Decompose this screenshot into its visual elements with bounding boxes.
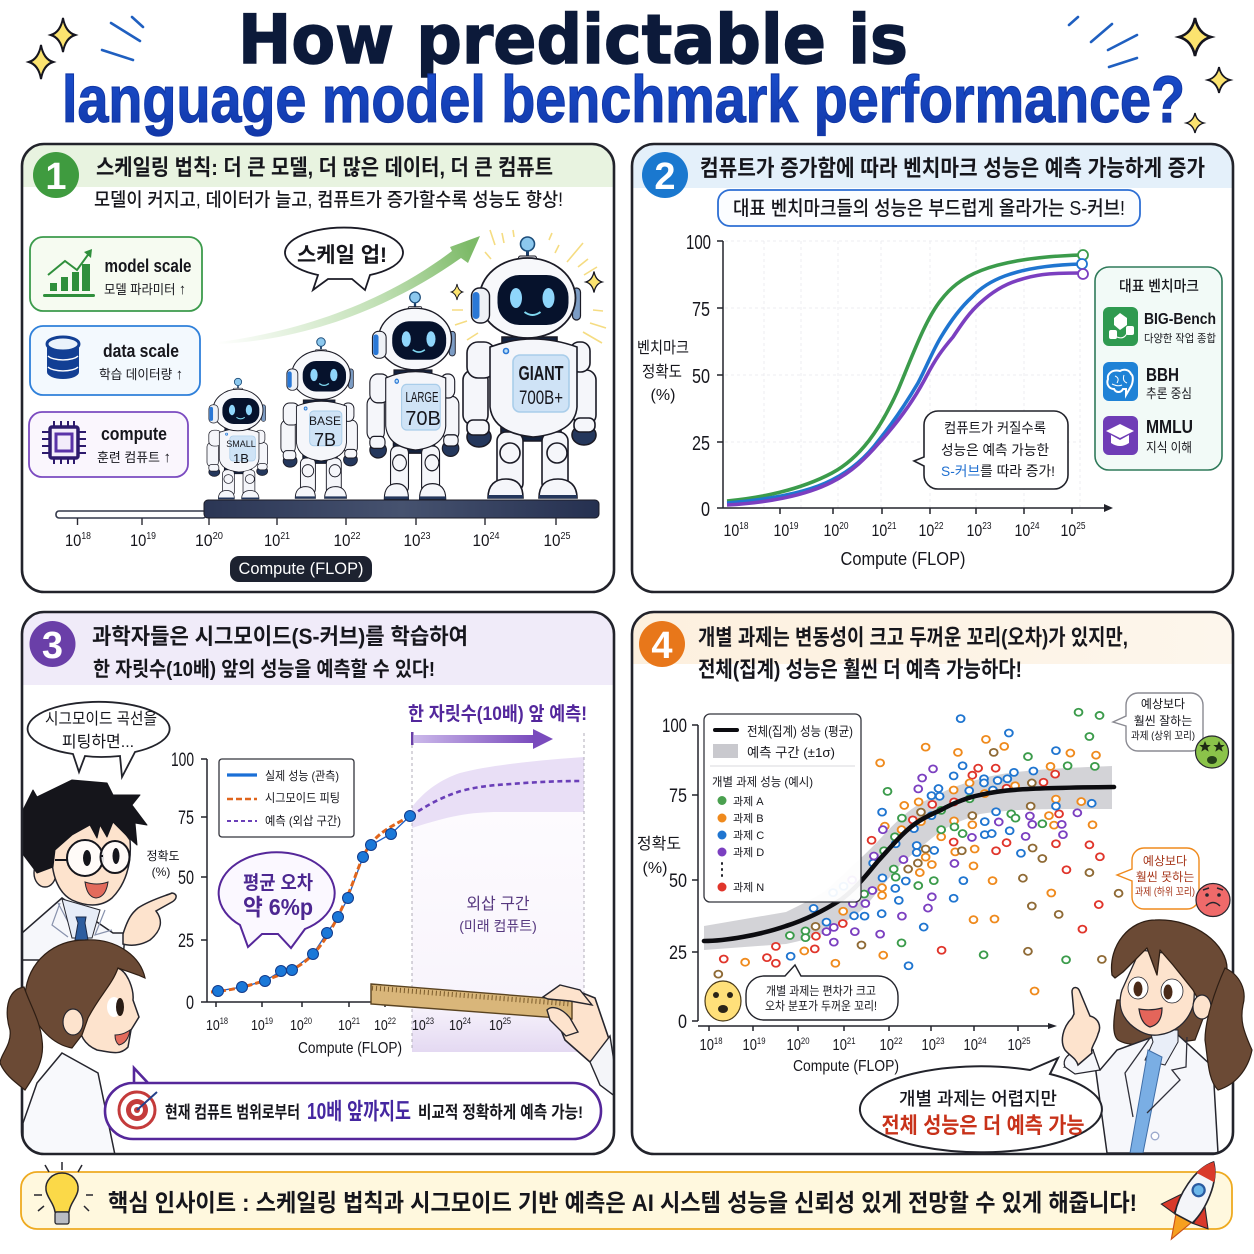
x axis label: Compute (FLOP) (298, 1040, 402, 1057)
panel 4 subheading: 전체(집계) 성능은 훨씬 더 예측 가능하다! (698, 657, 1022, 682)
extrapolation boundaries (412, 733, 584, 1050)
card: data scale: data scale (103, 341, 179, 361)
legend: representative benchmarks: MMLU (1146, 417, 1193, 437)
arrow: forecast range (411, 729, 553, 749)
compute axis labels: 10 (334, 531, 352, 550)
line chart: benchmarks vs compute: 10 (824, 521, 842, 540)
chart: sigmoid fit: 18 (220, 1016, 228, 1026)
callout: predictable ten times ahead (105, 1068, 601, 1139)
line chart: benchmarks vs compute: 10 (966, 521, 985, 540)
compute axis labels: 10 (195, 531, 214, 550)
illustration: boy scientist (22, 780, 176, 960)
extrapolation region shading (412, 812, 584, 1052)
badge 4 (639, 621, 685, 667)
legend: 전체(집계) 성능 (평균) (747, 724, 853, 739)
speech bubble: aggregate is predictable: 전체 성능은 더 예측 가능 (882, 1113, 1084, 1138)
line chart: benchmarks vs compute: 10 (1014, 521, 1033, 540)
callout: heavy tails: 개별 과제는 편차가 크고 (766, 984, 876, 998)
title (62, 1, 1185, 136)
chart: sigmoid fit: 10 (338, 1017, 355, 1034)
y axis label: 정확도 (642, 363, 682, 381)
badge 1: 1 (45, 156, 67, 198)
speech bubble: aggregate is predictable (860, 1058, 1102, 1152)
line chart: benchmarks vs compute: 21 (887, 521, 897, 532)
robot: base (281, 338, 357, 499)
panel 4 header band (632, 612, 1233, 664)
legend: 개별 과제 성능 (예시) (712, 775, 813, 789)
chart: sigmoid fit: 25 (503, 1016, 511, 1026)
compute axis labels: 22 (351, 531, 361, 542)
chart: sigmoid fit: 50 (178, 868, 194, 889)
illustration: long hair (1205, 968, 1252, 1090)
robot: large: 70B (405, 408, 441, 430)
legend: representative benchmarks: 다양한 작업 종합 (1144, 332, 1216, 345)
x axis label: Compute (FLOP) (793, 1058, 899, 1075)
chart: sigmoid fit: 25 (178, 931, 194, 952)
chart axes: 22 (894, 1036, 902, 1047)
icon: sad face (1196, 884, 1230, 916)
card: data scale: 학습 데이터량 ↑ (99, 366, 183, 383)
chart: sigmoid fit: 24 (463, 1016, 471, 1026)
arrow: scale-up trend (219, 236, 480, 344)
y axis label (637, 339, 689, 404)
chart: sigmoid fit: 75 (178, 808, 194, 829)
y axis label: 벤치마크 (637, 339, 689, 357)
compute axis labels: 23 (421, 531, 431, 542)
chart axes: 0 (678, 1012, 687, 1033)
callout: lower tail: 과제 (하위 꼬리) (1135, 885, 1195, 898)
callout: upper tail: 훨씬 잘하는 (1134, 714, 1192, 728)
robot: small: SMALL (226, 439, 256, 449)
compute axis labels: 10 (65, 531, 84, 550)
compute axis labels: 20 (213, 531, 223, 542)
callout: predictable ten times ahead: 현재 컴퓨트 범위로부터 (165, 1103, 300, 1122)
scatter: individual tasks (714, 709, 1122, 995)
callout: predictable ten times ahead: 비교적 정확하게 예측 가능! (418, 1103, 583, 1122)
line chart: benchmarks vs compute: 25 (692, 433, 710, 455)
chart axes: 10 (880, 1037, 897, 1054)
chart axes: 10 (786, 1037, 804, 1054)
line chart: benchmarks vs compute: 24 (1030, 521, 1040, 532)
chart axes: 18 (714, 1036, 722, 1047)
callout: upper tail (1113, 693, 1203, 751)
line chart: benchmarks vs compute: 0 (701, 499, 710, 521)
y axis label: 정확도 (637, 835, 681, 853)
legend: 실제 성능 (관측) (265, 769, 339, 783)
card: compute: compute (101, 424, 167, 444)
callout: predictable ten times ahead: 10배 앞까지도 (307, 1098, 411, 1124)
compute axis labels: 10 (404, 531, 422, 550)
chart: sigmoid fit: 10 (449, 1017, 466, 1034)
panel 3 heading: 과학자들은 시그모이드(S-커브)를 학습하여 (92, 624, 468, 649)
speech bubble: fitting the sigmoid: 피팅하면... (62, 733, 134, 751)
legend: representative benchmarks (1095, 267, 1222, 470)
panel 3 subheading: 한 자릿수(10배) 앞의 성능을 예측할 수 있다! (93, 658, 435, 681)
y axis label: 정확도 (146, 849, 180, 863)
compute axis labels: 10 (130, 531, 149, 550)
icon: rocket (1149, 1150, 1237, 1252)
robot: small (207, 378, 268, 499)
card: model scale: 모델 파라미터 ↑ (104, 281, 186, 298)
chart axes: 100 (662, 716, 687, 737)
panel: scaling laws (22, 144, 614, 592)
robot: small: 1B (233, 451, 249, 466)
robot: large (367, 292, 459, 499)
robot: base: BASE (309, 414, 341, 428)
chart: sigmoid fit: 21 (352, 1016, 360, 1026)
card: model scale (30, 237, 202, 311)
subtitle pill (718, 190, 1140, 226)
line chart: benchmarks vs compute: 10 (774, 521, 792, 540)
robot: large: LARGE (406, 389, 438, 406)
title: How predictable is (238, 1, 908, 80)
speech bubble: fitting the sigmoid: 시그모이드 곡선을 (45, 710, 157, 728)
chart axes: 20 (801, 1036, 810, 1047)
chart axes: 50 (669, 871, 687, 892)
callout: mean error (219, 852, 335, 948)
legend: 과제 N (733, 881, 764, 894)
label: extrapolation region: (미래 컴퓨트) (459, 918, 537, 934)
chart: sigmoid fit: 20 (304, 1016, 312, 1026)
panel 2 header band (632, 144, 1233, 188)
icon: worried face (705, 981, 741, 1021)
chart axes: 24 (978, 1036, 986, 1047)
panel 1 subheading: 모델이 커지고, 데이터가 늘고, 컴퓨트가 증가할수록 성능도 향상! (94, 189, 563, 211)
legend: representative benchmarks: 대표 벤치마크 (1119, 278, 1199, 295)
legend: 과제 D (733, 846, 764, 859)
badge 4: 4 (651, 625, 673, 667)
line chart: benchmarks vs compute: 10 (724, 521, 742, 540)
card: data scale (30, 326, 200, 395)
compute axis labels: 19 (146, 531, 156, 542)
legend: 과제 C (733, 829, 764, 842)
chart axes: 10 (832, 1037, 850, 1054)
y axis label (637, 835, 681, 877)
callout: heavy tails (746, 965, 898, 1020)
compute axis labels: 10 (264, 531, 283, 550)
chart: sigmoid fit: 100 (171, 750, 194, 771)
panel: benchmark S-curves (632, 144, 1233, 592)
robot: giant: GIANT (518, 363, 564, 385)
legend (704, 714, 861, 902)
line chart: benchmarks vs compute: 25 (1076, 521, 1086, 532)
robot: base: 7B (314, 430, 336, 450)
legend: representative benchmarks: BBH (1146, 365, 1179, 385)
compute axis labels: 24 (490, 531, 500, 542)
chart axes: 10 (700, 1037, 717, 1054)
chart axes (662, 716, 1057, 1054)
callout: compute grows: 성능은 예측 가능한 (941, 442, 1049, 458)
line chart: benchmarks vs compute: 10 (872, 521, 890, 540)
callout: compute grows: 컴퓨트가 커질수록 (944, 420, 1046, 436)
badge 3 (30, 621, 76, 667)
compute axis labels: 21 (280, 531, 290, 542)
line chart: benchmarks vs compute: 10 (1060, 521, 1079, 540)
panel: sigmoid extrapolation (0, 612, 620, 1155)
robot: giant: 700B+ (519, 388, 563, 409)
platform and compute scale bar (56, 500, 599, 525)
legend: representative benchmarks: 지식 이해 (1146, 440, 1192, 455)
legend: 예측 구간 (±1σ) (747, 745, 835, 760)
line chart: benchmarks vs compute: 10 (918, 521, 937, 540)
robot: giant (451, 230, 606, 498)
axis title pill: compute: Compute (FLOP) (238, 559, 364, 578)
insight text: 핵심 인사이트 : 스케일링 법칙과 시그모이드 기반 예측은 AI 시스템 성능을 신뢰성 있게 전망할 수 있게 해줍니다! (108, 1190, 1137, 1217)
callout: lower tail: 훨씬 못하는 (1136, 870, 1194, 884)
chart axes: 10 (1008, 1037, 1025, 1054)
key insight banner (21, 1150, 1237, 1252)
legend: representative benchmarks: BIG-Bench (1144, 311, 1216, 328)
compute axis labels: 25 (561, 531, 571, 542)
icon: MMLU graduation cap (1103, 416, 1138, 455)
compute axis labels: 10 (544, 531, 562, 550)
chart: sigmoid fit: 10 (251, 1017, 268, 1034)
chart: aggregate band (704, 766, 1112, 950)
icon: lightbulb (34, 1162, 93, 1224)
panel 1 header band (22, 144, 614, 187)
speech bubble: scale up: 스케일 업! (297, 244, 387, 267)
chart: sigmoid fit: 19 (265, 1016, 273, 1026)
chart axes: 25 (669, 943, 687, 964)
illustration: ponytail (0, 987, 43, 1090)
aggregate mean curve (704, 787, 1114, 941)
badge 3: 3 (42, 625, 63, 667)
card: model scale: model scale (104, 256, 192, 276)
legend (219, 759, 354, 837)
badge 2: 2 (654, 156, 676, 198)
chart axes: 10 (964, 1037, 981, 1054)
badge 2 (642, 152, 688, 198)
y axis label: (%) (152, 865, 170, 879)
speech bubble: fitting the sigmoid (28, 702, 170, 777)
compute axis labels: 10 (472, 531, 491, 550)
callout: upper tail: 예상보다 (1141, 697, 1185, 711)
chart axes: 10 (922, 1037, 939, 1054)
line chart: benchmarks vs compute: 23 (982, 521, 992, 532)
callout: upper tail: 과제 (상위 꼬리) (1131, 729, 1195, 742)
legend: 과제 A (733, 795, 764, 808)
compute axis labels (65, 531, 571, 550)
callout: mean error: 평균 오차 (243, 872, 313, 894)
heading: one order ahead: 한 자릿수(10배) 앞 예측! (408, 703, 587, 725)
callout: mean error: 약 6%p (243, 894, 313, 920)
line chart: benchmarks vs compute: 18 (739, 521, 749, 532)
legend: representative benchmarks: 추론 중심 (1146, 386, 1192, 401)
chart: sigmoid fit: 23 (426, 1016, 434, 1026)
chart: sigmoid fit: 22 (388, 1016, 396, 1026)
y axis label: (%) (643, 860, 667, 877)
panel: individual tasks vs aggregate (632, 612, 1252, 1154)
chart axes: 19 (757, 1036, 766, 1047)
label: extrapolation region: 외삽 구간 (466, 895, 530, 913)
y axis label (146, 849, 180, 879)
callout: lower tail (1117, 848, 1199, 909)
icon: target (119, 1092, 157, 1128)
speech bubble: scale up (285, 228, 403, 290)
card: compute: 훈련 컴퓨트 ↑ (97, 449, 171, 466)
chart: sigmoid fit: 10 (206, 1017, 223, 1034)
chart axes: 23 (936, 1036, 944, 1047)
line chart: benchmarks vs compute: 50 (692, 366, 710, 388)
prediction band (412, 757, 584, 828)
icon: BBH brain (1103, 362, 1138, 401)
chart axes: 21 (847, 1036, 856, 1047)
illustration: ruler and hand (371, 984, 620, 1100)
badge 1 (33, 152, 79, 198)
callout: heavy tails: 오차 분포가 두꺼운 꼬리! (765, 999, 877, 1013)
x axis label: Compute (FLOP) (840, 549, 966, 569)
chart axes: 75 (669, 786, 687, 807)
label: extrapolation region (459, 895, 537, 934)
y axis label: (%) (651, 387, 675, 404)
legend: 예측 (외삽 구간) (265, 814, 341, 828)
compute axis labels: 18 (81, 531, 91, 542)
line chart: benchmarks vs compute: 75 (692, 299, 710, 321)
line chart: benchmarks vs compute: 100 (686, 232, 711, 254)
card: compute (29, 412, 188, 477)
speech bubble: aggregate is predictable: 개별 과제는 어렵지만 (899, 1089, 1057, 1109)
legend: 과제 B (733, 812, 764, 825)
callout: lower tail: 예상보다 (1143, 854, 1187, 868)
line chart: benchmarks vs compute: 20 (839, 521, 849, 532)
callout: compute grows (914, 411, 1068, 489)
chart axes: 25 (1022, 1036, 1030, 1047)
legend: 시그모이드 피팅 (265, 791, 340, 805)
chart: sigmoid fit: 10 (489, 1017, 506, 1034)
chart: sigmoid fit (171, 750, 580, 1034)
subtitle pill: 대표 벤치마크들의 성능은 부드럽게 올라가는 S-커브! (733, 197, 1125, 220)
line chart: benchmarks vs compute: 19 (789, 521, 799, 532)
icon: sparkles and accent strokes (29, 17, 1230, 133)
chart: sigmoid fit: 0 (186, 993, 194, 1014)
icon: star-eyed face (1196, 736, 1228, 768)
panel 3 header band (22, 612, 614, 685)
line chart: benchmarks vs compute (686, 232, 1113, 540)
chart: sigmoid fit: 10 (412, 1017, 429, 1034)
panel 4 heading: 개별 과제는 변동성이 크고 두꺼운 꼬리(오차)가 있지만, (698, 625, 1128, 650)
line chart: benchmarks vs compute: 22 (934, 521, 944, 532)
illustration: girl scientist pointing (1062, 920, 1227, 1153)
icon: BIG-Bench (1103, 307, 1138, 346)
callout: compute grows: S-커브를 따라 증가! (941, 463, 1055, 479)
illustration: girl scientist (23, 940, 145, 1155)
chart: sigmoid fit: 10 (290, 1017, 307, 1034)
chart: sigmoid fit: 10 (374, 1017, 391, 1034)
panel 1 heading: 스케일링 법칙: 더 큰 모델, 더 많은 데이터, 더 큰 컴퓨트 (96, 155, 553, 180)
axis title pill: compute (230, 556, 372, 582)
panel 2 heading: 컴퓨트가 증가함에 따라 벤치마크 성능은 예측 가능하게 증가 (700, 156, 1205, 181)
chart axes: 10 (742, 1037, 760, 1054)
